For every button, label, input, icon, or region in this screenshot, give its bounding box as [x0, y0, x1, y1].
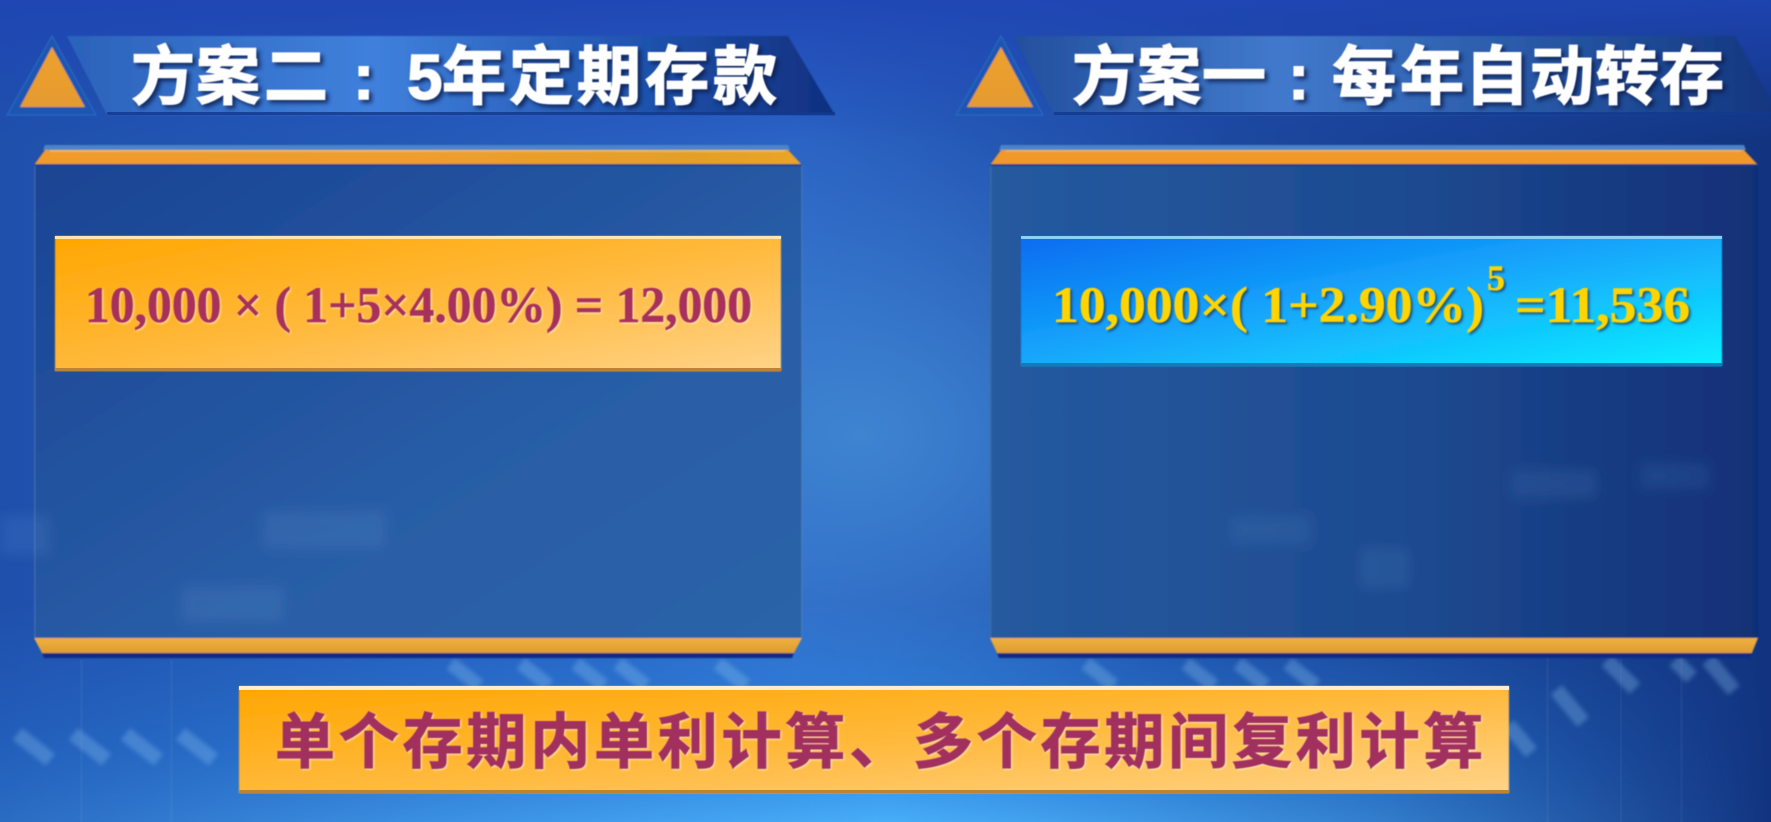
left panel body	[35, 165, 802, 639]
left bottom orange bar	[34, 638, 802, 658]
exponent: 5	[1487, 258, 1505, 298]
right banner ribbon	[1014, 36, 1771, 115]
compound interest formula: 10,000×( 1+2.90%)	[1052, 278, 1484, 334]
right panel faint background marks	[1230, 462, 1710, 588]
left top orange bar	[34, 145, 802, 166]
compound interest result: =11,536	[1515, 278, 1690, 334]
right banner title: 方案一:每年自动转存	[1072, 41, 1724, 113]
conclusion text: 单个存期内单利计算、多个存期间复利计算	[275, 709, 1487, 776]
callout: conclusion	[239, 686, 1509, 793]
heading: right banner	[956, 36, 1771, 115]
simple interest formula: 10,000 × ( 1+5×4.00%) = 12,000	[85, 278, 752, 334]
right panel body	[990, 165, 1758, 639]
icon: right orange triangle	[956, 36, 1043, 115]
formula box: simple interest	[55, 236, 781, 371]
formula box: compound interest	[1021, 236, 1722, 366]
panel: right plan	[990, 145, 1758, 658]
icon: left orange triangle	[7, 36, 96, 115]
panel: left plan	[0, 145, 802, 658]
heading: left banner	[7, 36, 835, 115]
right bottom orange bar	[990, 638, 1758, 658]
left panel faint background marks	[0, 510, 387, 623]
left banner ribbon	[67, 36, 835, 115]
left banner title: 方案二:5年定期存款	[131, 41, 777, 113]
right top orange bar	[990, 145, 1758, 166]
